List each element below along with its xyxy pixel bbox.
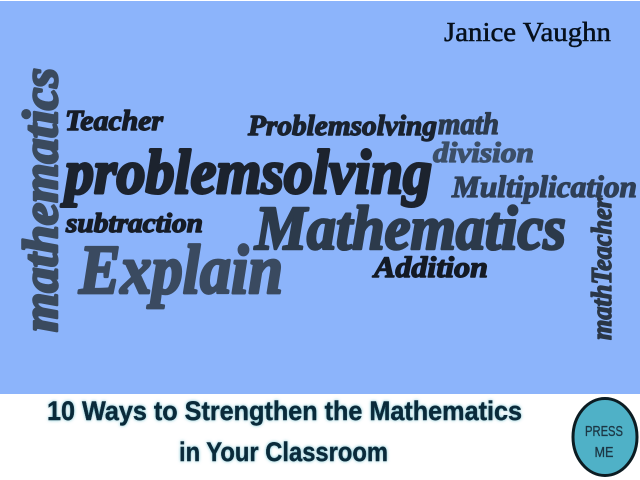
word: Addition: Addition [372, 251, 488, 284]
button: press me [573, 398, 637, 476]
word: subtraction: subtraction [65, 208, 203, 238]
word: mathematics vertical: mathematics [12, 68, 68, 332]
word: problemsolving large: problemsolving [60, 139, 432, 207]
title: in Your Classroom [179, 437, 388, 467]
word: Problemsolving small: Problemsolving [247, 110, 437, 142]
word cloud [12, 68, 637, 340]
button: press me: ME [594, 444, 614, 461]
word: Explain: Explain [78, 232, 283, 309]
word: math: math [438, 106, 499, 141]
author name: Janice Vaughn [444, 17, 612, 47]
word: Multiplication: Multiplication [451, 169, 637, 204]
word: mathTeacher vertical: mathTeacher [586, 197, 618, 340]
title [47, 396, 522, 467]
button: press me: PRESS [585, 423, 623, 440]
word: Teacher: Teacher [65, 106, 164, 137]
word: Mathematics large: Mathematics [254, 195, 566, 263]
title: 10 Ways to Strengthen the Mathematics [47, 396, 522, 426]
word: division: division [433, 137, 534, 169]
